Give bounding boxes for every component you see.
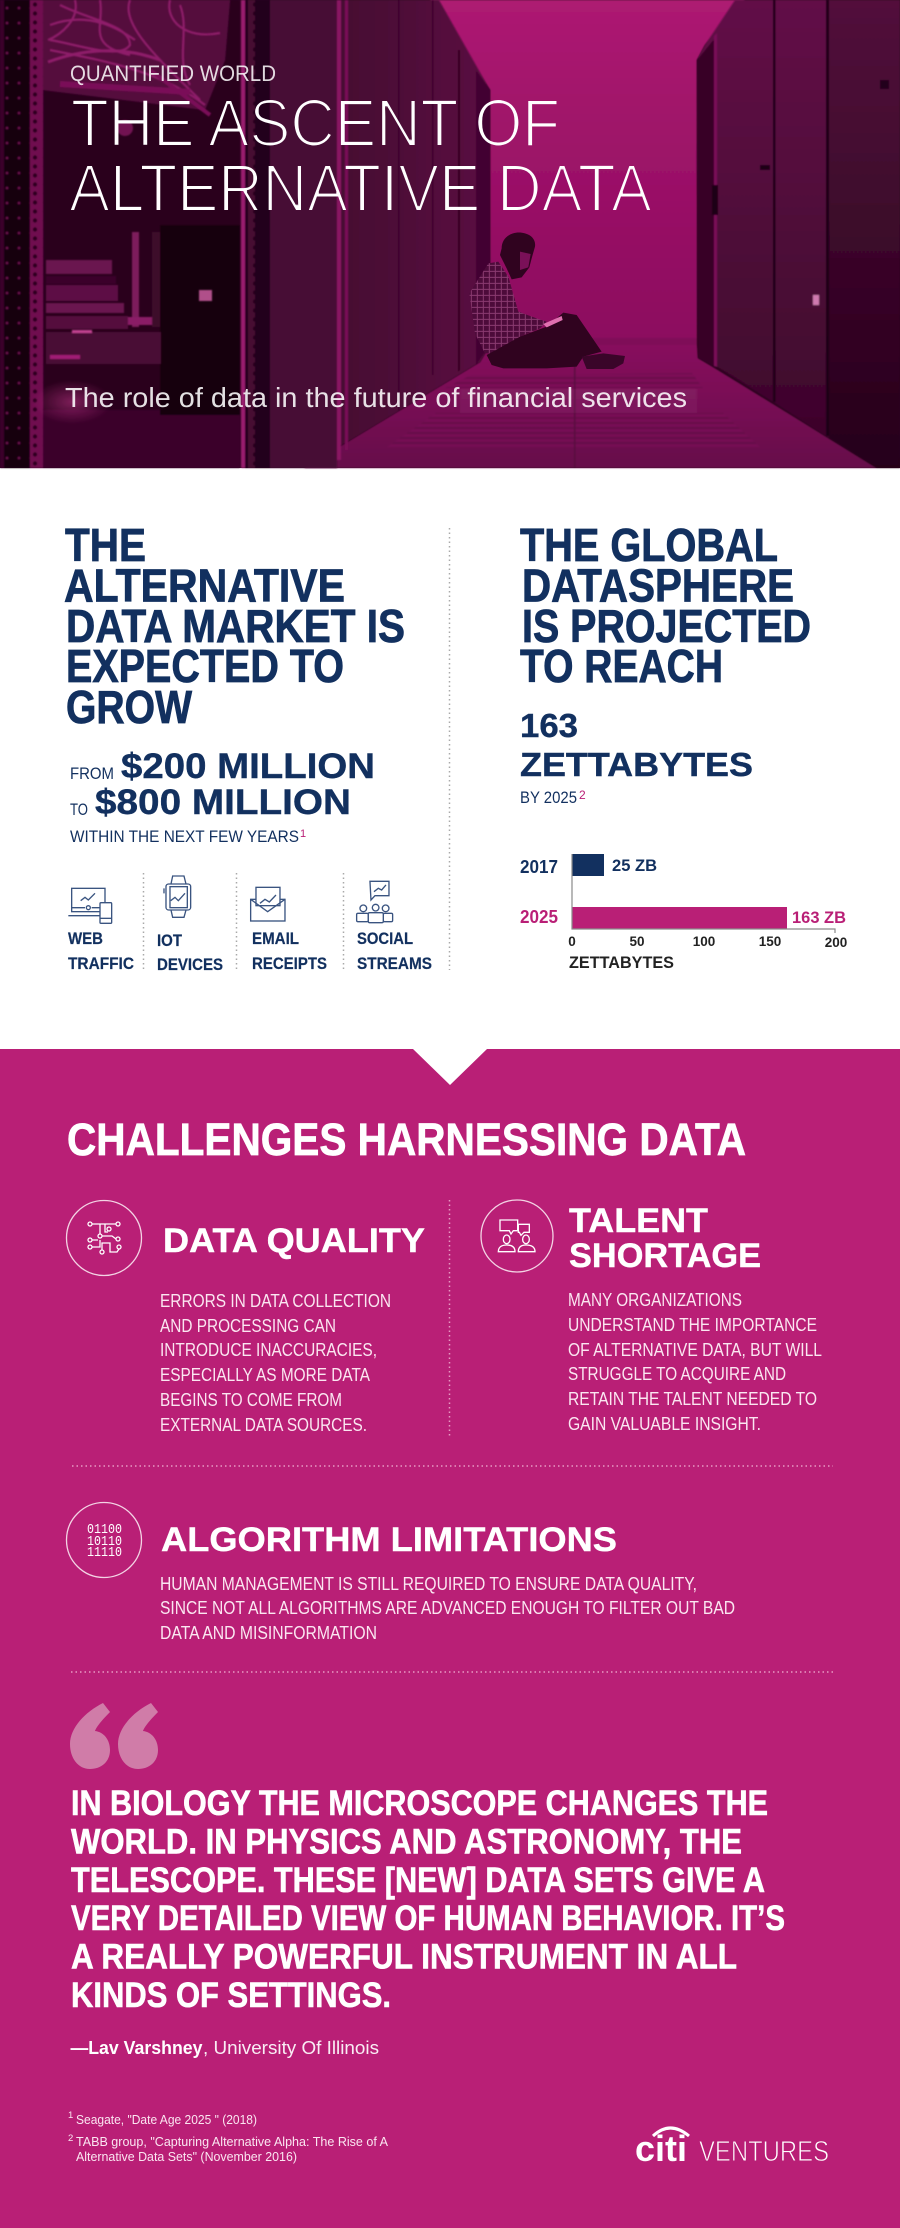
bar chart: 2017 — [520, 857, 558, 877]
body text: DATA AND MISINFORMATION — [160, 1623, 377, 1643]
heading: challenges: CHALLENGES HARNESSING DATA — [67, 1114, 746, 1165]
body text: RETAIN THE TALENT NEEDED TO — [568, 1389, 817, 1409]
bar chart: 100 — [693, 934, 715, 949]
panel: global datasphere — [520, 519, 847, 972]
category labels: STREAMS — [357, 955, 432, 973]
heading — [64, 519, 405, 733]
heading: IS PROJECTED — [522, 600, 811, 652]
bar chart: 25 ZB — [612, 856, 657, 875]
heading: TALENT — [569, 1202, 708, 1240]
key figure: BY 2025 — [520, 788, 577, 807]
category labels: TRAFFIC — [68, 955, 134, 973]
title — [69, 86, 652, 226]
icon: binary digits: 01100 — [87, 1522, 122, 1538]
footnotes: TABB group, "Capturing Alternative Alpha: The Rise of A — [76, 2134, 388, 2149]
heading: DATASPHERE — [522, 560, 794, 612]
key figure: 163 — [520, 707, 578, 744]
growth figures: $200 MILLION — [121, 747, 375, 786]
heading — [520, 519, 811, 692]
heading — [569, 1202, 761, 1275]
growth figures: WITHIN THE NEXT FEW YEARS — [70, 828, 299, 846]
bar chart: 2025 — [520, 907, 558, 927]
heading: GROW — [66, 681, 192, 733]
server racks on the left — [0, 0, 490, 468]
body text: INTRODUCE INACCURACIES, — [160, 1340, 377, 1360]
icon: email — [251, 887, 285, 921]
quote text: A REALLY POWERFUL INSTRUMENT IN ALL — [71, 1938, 737, 1977]
panel: challenges section background with notch — [0, 1049, 900, 2228]
rack hardware — [32, 120, 212, 424]
body text: UNDERSTAND THE IMPORTANCE — [568, 1315, 817, 1335]
bar chart: 200 — [825, 935, 847, 950]
icon: iot watch — [164, 876, 191, 917]
panel: talent shortage — [481, 1200, 822, 1434]
body text — [160, 1291, 391, 1435]
icon: quotation mark — [70, 1703, 158, 1769]
bar chart: 150 — [759, 934, 781, 949]
heading: THE — [65, 519, 146, 571]
footnotes: 1 — [68, 2110, 73, 2121]
eyebrow: QUANTIFIED WORLD — [70, 61, 276, 86]
quote text — [71, 1784, 785, 2015]
panel: quote — [70, 1703, 785, 2058]
server racks on the right — [697, 0, 900, 468]
title: THE ASCENT OF — [71, 86, 560, 161]
key figure: ZETTABYTES — [520, 746, 753, 783]
category labels: WEB — [68, 930, 103, 948]
attribution: , University Of Illinois — [203, 2038, 379, 2058]
category labels — [68, 930, 432, 974]
quote text: VERY DETAILED VIEW OF HUMAN BEHAVIOR. IT’S — [71, 1899, 785, 1938]
category labels: DEVICES — [157, 956, 223, 974]
quote text: KINDS OF SETTINGS. — [71, 1976, 391, 2015]
panel: hero photo banner — [0, 0, 900, 468]
growth figures: 1 — [300, 828, 306, 840]
category labels: IOT — [157, 932, 182, 950]
cable bundle — [48, 0, 220, 115]
icon: social streams — [357, 881, 393, 923]
heading: DATA QUALITY — [163, 1222, 425, 1260]
category labels: EMAIL — [252, 930, 299, 948]
body text: AND PROCESSING CAN — [160, 1316, 336, 1336]
body text: BEGINS TO COME FROM — [160, 1390, 342, 1410]
icon: binary digits: 10110 — [87, 1534, 122, 1550]
icon: circuit — [66, 1200, 142, 1276]
footnotes: Seagate, "Date Age 2025 " (2018) — [76, 2112, 257, 2127]
heading: ALGORITHM LIMITATIONS — [161, 1521, 617, 1559]
body text: STRUGGLE TO ACQUIRE AND — [568, 1364, 786, 1384]
attribution — [70, 2038, 379, 2058]
panel: data quality — [66, 1200, 425, 1435]
body text: ERRORS IN DATA COLLECTION — [160, 1291, 391, 1311]
heading: EXPECTED TO — [66, 640, 344, 692]
bar chart: 0 — [568, 934, 576, 949]
body text — [568, 1290, 822, 1434]
bar chart — [520, 854, 847, 972]
logo: citi ventures: VENTURES — [699, 2136, 829, 2168]
bar chart: 163 ZB — [792, 908, 846, 927]
category labels: RECEIPTS — [252, 955, 327, 973]
attribution: —Lav Varshney — [70, 2038, 202, 2058]
body text: ESPECIALLY AS MORE DATA — [160, 1365, 370, 1385]
growth figures: FROM — [70, 764, 114, 783]
growth figures — [70, 747, 375, 846]
man sitting against the rack reading a tablet — [469, 232, 625, 369]
icon: binary digits: 11110 — [87, 1545, 122, 1561]
title: ALTERNATIVE DATA — [69, 151, 652, 226]
footnotes — [68, 2110, 388, 2164]
icon: conversation — [481, 1200, 553, 1272]
growth figures: $800 MILLION — [95, 783, 351, 822]
quote text: IN BIOLOGY THE MICROSCOPE CHANGES THE — [71, 1784, 768, 1823]
body text: OF ALTERNATIVE DATA, BUT WILL — [568, 1340, 822, 1360]
body text: SINCE NOT ALL ALGORITHMS ARE ADVANCED ENOUGH TO FILTER OUT BAD — [160, 1598, 735, 1618]
body text: EXTERNAL DATA SOURCES. — [160, 1415, 367, 1435]
body text: MANY ORGANIZATIONS — [568, 1290, 742, 1310]
logo: citi ventures: citi — [635, 2128, 687, 2169]
growth figures: TO — [70, 800, 88, 819]
panel: algorithm limitations — [66, 1502, 735, 1643]
quote text: WORLD. IN PHYSICS AND ASTRONOMY, THE — [71, 1822, 742, 1861]
heading: THE GLOBAL — [520, 519, 778, 571]
bar chart: 50 — [629, 934, 645, 949]
heading: TO REACH — [520, 640, 723, 692]
icon: binary digits — [66, 1502, 142, 1578]
body text: GAIN VALUABLE INSIGHT. — [568, 1414, 761, 1434]
quote text: TELESCOPE. THESE [NEW] DATA SETS GIVE A — [71, 1861, 765, 1900]
body text: HUMAN MANAGEMENT IS STILL REQUIRED TO ENSURE DATA QUALITY, — [160, 1574, 697, 1594]
icon: web traffic — [68, 888, 112, 923]
bar chart: ZETTABYTES — [569, 954, 674, 972]
category labels: SOCIAL — [357, 930, 413, 948]
heading: SHORTAGE — [569, 1237, 761, 1275]
heading: DATA MARKET IS — [66, 600, 405, 652]
subtitle: The role of data in the future of financial services — [65, 382, 687, 413]
logo: citi ventures — [635, 2128, 829, 2169]
panel: alternative data market — [64, 519, 432, 974]
key figure: 2 — [579, 788, 586, 802]
footnotes: 2 — [68, 2133, 73, 2144]
body text — [160, 1574, 735, 1643]
data center corridor background — [304, 0, 877, 468]
heading: ALTERNATIVE — [64, 560, 345, 612]
key figure — [520, 707, 753, 807]
footnotes: Alternative Data Sets" (November 2016) — [76, 2149, 297, 2164]
